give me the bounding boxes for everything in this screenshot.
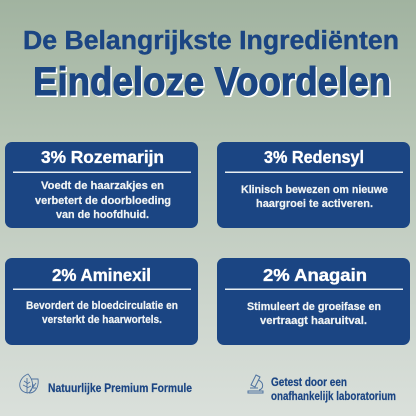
- title line 2: Eindeloze Voordelen: [33, 60, 391, 104]
- text: Getest door een onafhankelijk laboratorium: [271, 377, 396, 403]
- text: Rozemarijn description: [35, 180, 171, 221]
- text: Aminexil description: Bevordert de bloedcirculatie en: [26, 300, 178, 312]
- title line 1: De Belangrijkste Ingrediënten: [23, 27, 399, 55]
- text: Anagain description: Stimuleert de groeifase en: [247, 301, 381, 313]
- icon: microscope: [248, 375, 263, 393]
- text: Redensyl description: haargroei te activeren.: [256, 198, 373, 210]
- heading: 2% Anagain: 2% Anagain: [263, 265, 367, 285]
- text: Aminexil description: [26, 300, 178, 326]
- text: Redensyl description: [241, 184, 388, 210]
- text: Rozemarijn description: van de hoofdhuid.: [56, 209, 149, 221]
- panel: 3% Redensyl: [217, 142, 410, 228]
- title line 2: Eindeloze Voordelen: [34, 62, 392, 106]
- panel: 3% Rozemarijn: [5, 142, 198, 228]
- text: Redensyl description: Klinisch bewezen om nieuwe: [241, 184, 388, 196]
- text: Aminexil description: versterkt de haarwortels.: [42, 314, 162, 326]
- text: Getest door een onafhankelijk laboratorium: Getest door een: [271, 377, 347, 389]
- heading: 3% Rozemarijn: 3% Rozemarijn: [41, 147, 164, 167]
- title: [23, 27, 399, 106]
- text: Natuurlijke Premium Formule: Natuurlijke Premium Formule: [48, 383, 192, 395]
- panel: 2% Aminexil: [5, 258, 198, 345]
- text: Anagain description: [247, 301, 381, 327]
- heading: 3% Redensyl: 3% Redensyl: [264, 147, 364, 167]
- panel: 2% Anagain: [217, 258, 410, 345]
- heading: 2% Aminexil: 2% Aminexil: [52, 265, 151, 285]
- icon: leaves: [20, 374, 38, 393]
- text: Getest door een onafhankelijk laboratorium: onafhankelijk laboratorium: [271, 391, 396, 403]
- text: Anagain description: vertraagt haaruitval.: [260, 315, 367, 327]
- text: Rozemarijn description: Voedt de haarzakjes en: [41, 180, 164, 192]
- text: Rozemarijn description: verbetert de doorbloeding: [35, 195, 171, 207]
